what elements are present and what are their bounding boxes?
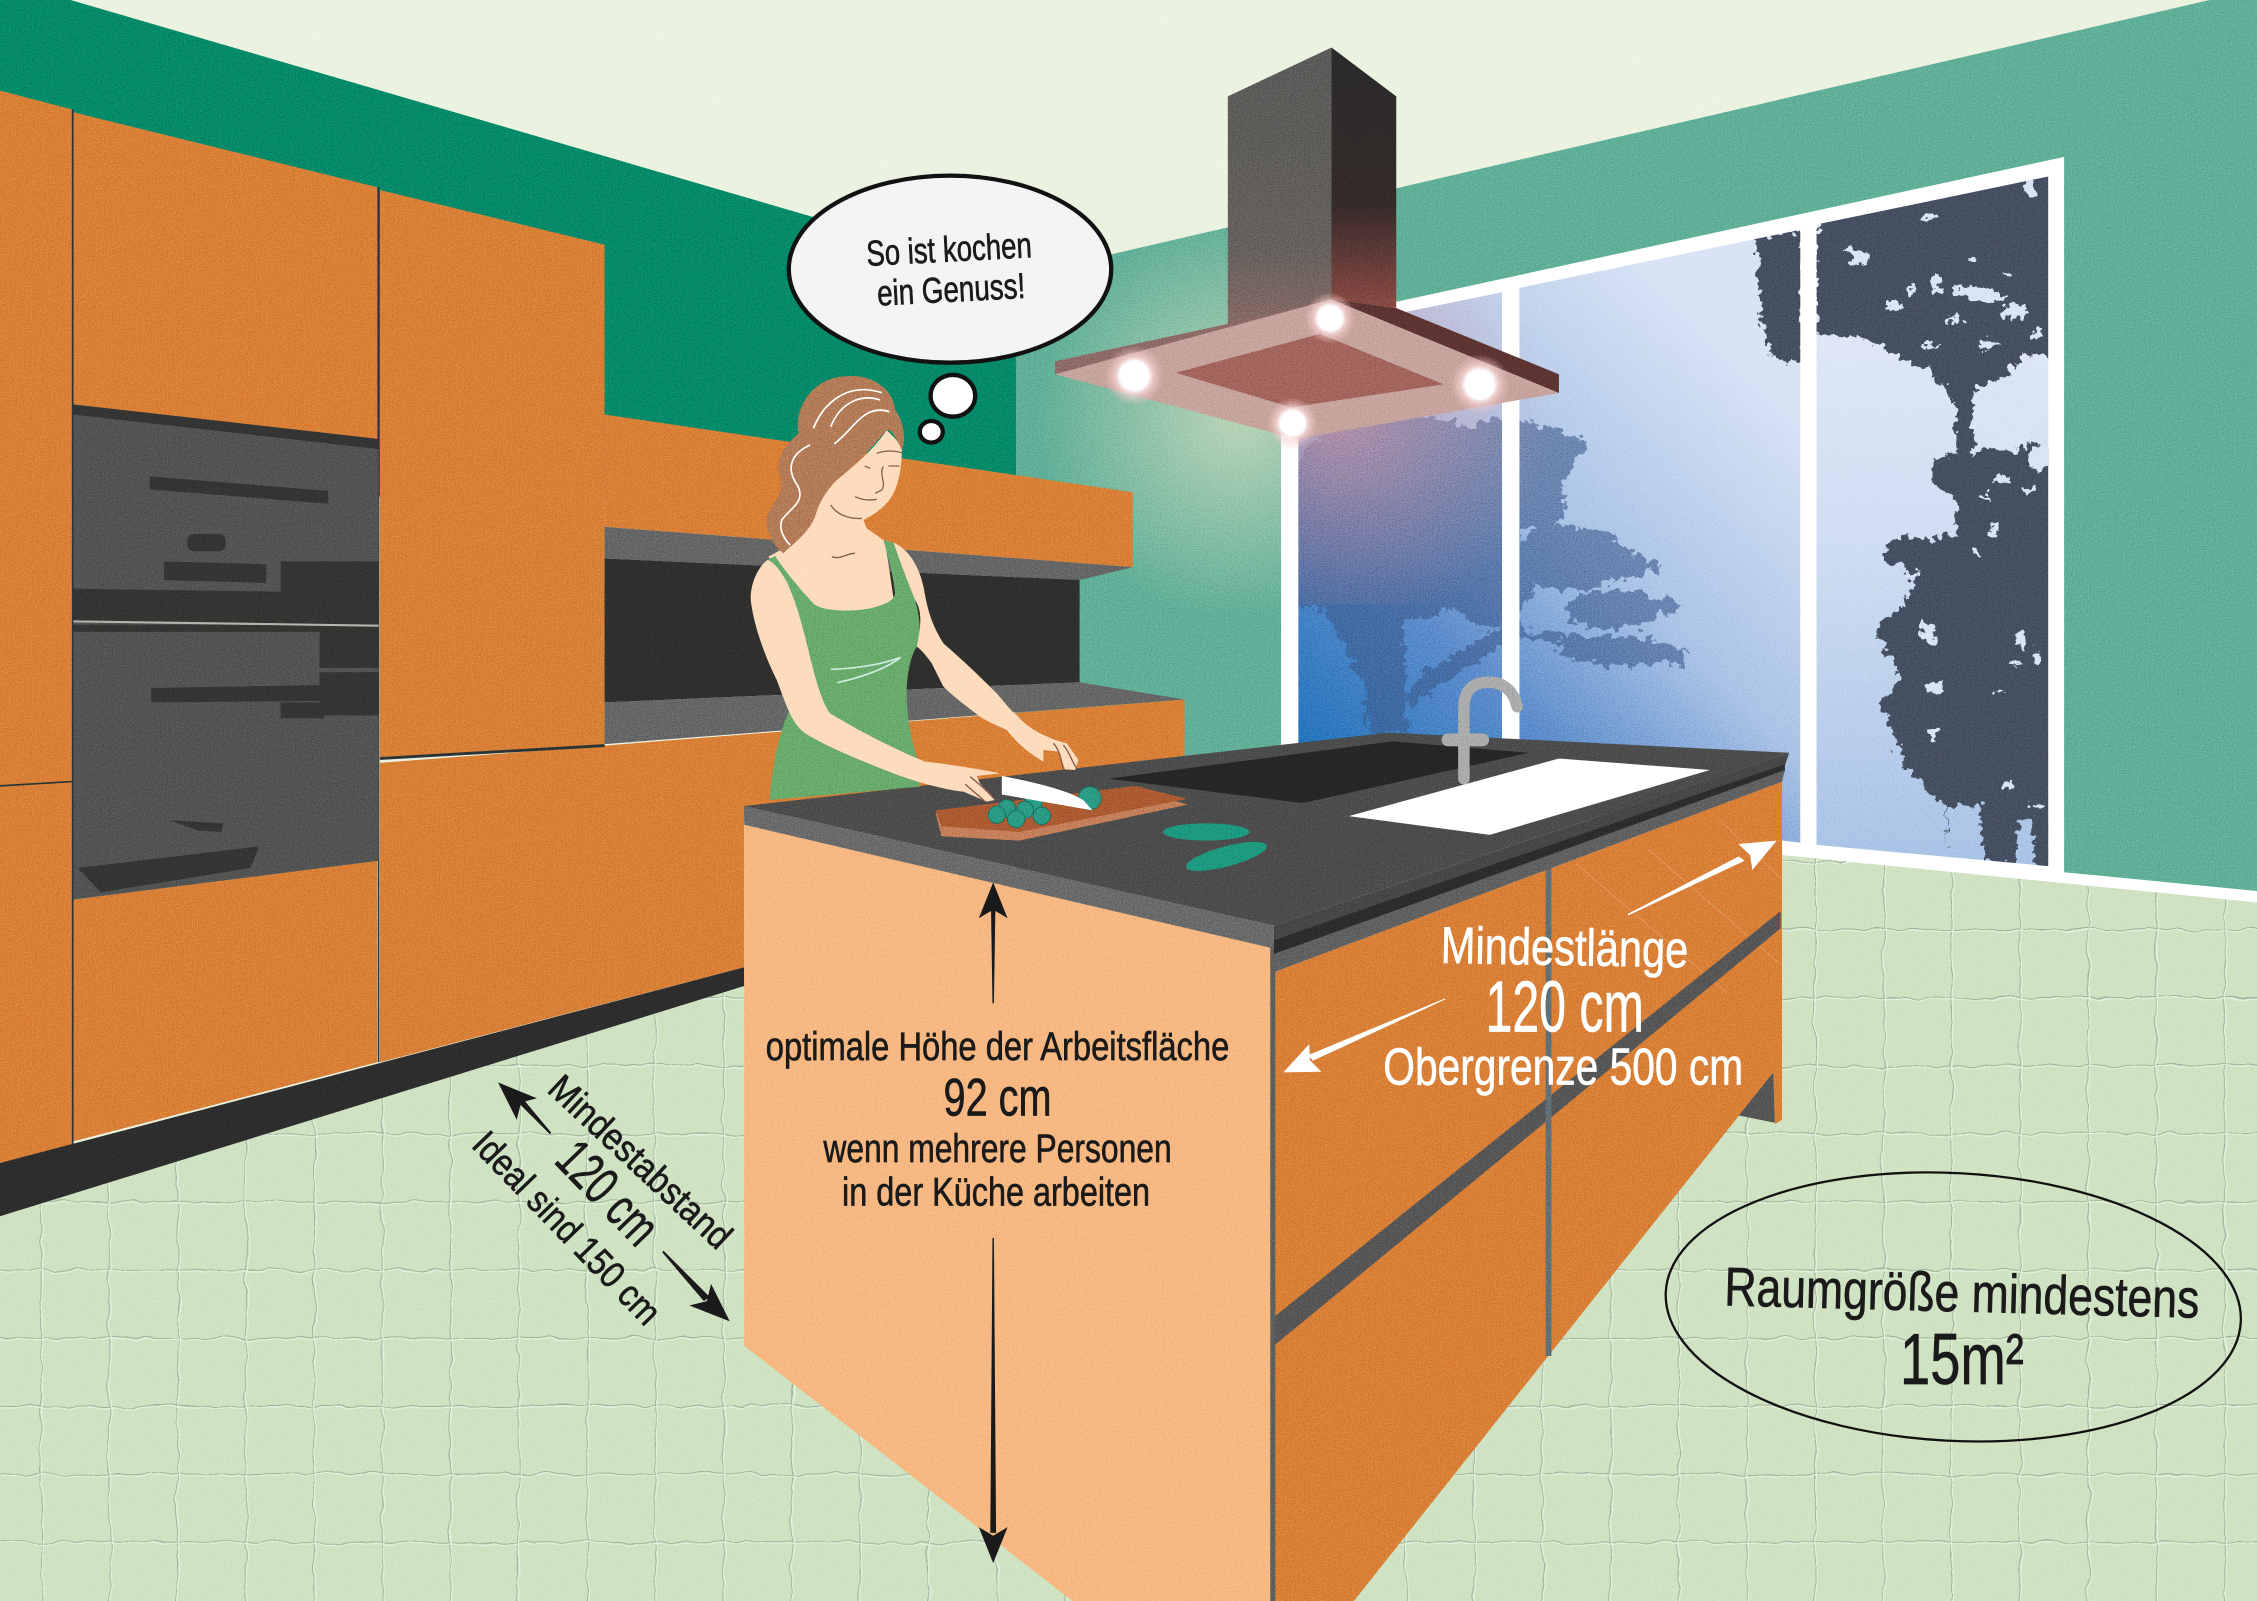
hair strands and facial lines — [781, 390, 1077, 802]
right wall — [1016, 0, 2257, 921]
distance text: 120 cm — [544, 1129, 671, 1257]
chimney — [1228, 47, 1331, 331]
woman cooking — [751, 376, 1078, 802]
white sink — [1349, 759, 1710, 835]
upper cabinet column — [73, 112, 377, 439]
height text: 92 cm — [944, 1069, 1051, 1128]
chopped cucumber — [988, 787, 1101, 828]
baseboard white strip — [1782, 842, 2257, 902]
peach end panel — [744, 825, 1271, 1601]
callout text — [1724, 1255, 2200, 1400]
height text — [766, 1024, 1229, 1214]
floor tile grid — [0, 835, 2257, 1601]
dress — [767, 540, 920, 800]
callout text: 15m² — [1900, 1320, 2024, 1400]
length text: Obergrenze 500 cm — [1383, 1038, 1743, 1096]
cabinet column far left — [0, 91, 72, 1163]
right arm — [893, 543, 1078, 770]
thought dots — [920, 375, 975, 443]
range hood — [1055, 47, 1559, 449]
floor — [0, 835, 2257, 1601]
hob — [1108, 741, 1529, 803]
black backsplash — [605, 558, 1080, 702]
cutting board — [936, 786, 1188, 841]
length text: Mindestlänge — [1440, 916, 1689, 978]
right tree — [1756, 166, 2058, 871]
face and torso skin — [768, 430, 902, 623]
back counter top — [605, 682, 1185, 744]
height annotation — [766, 882, 1229, 1563]
hood canopy — [1055, 299, 1331, 374]
cabinet joints — [0, 109, 605, 1144]
drawer gaps — [1270, 864, 1781, 1601]
lower cabinet column — [73, 861, 377, 1141]
kitchen island — [744, 682, 1789, 1601]
sky gaps in foliage — [1841, 180, 2054, 810]
base cabinets — [380, 700, 1185, 1062]
built-in oven — [73, 404, 379, 900]
upper wall cabinet band — [605, 415, 1133, 567]
distance text: Ideal sind 150 cm — [465, 1123, 670, 1333]
wall shelf underside — [605, 527, 1133, 580]
speech bubble — [789, 176, 1111, 443]
whole cucumbers — [1163, 823, 1269, 877]
faucet — [1448, 682, 1517, 779]
back wall dark green — [0, 0, 1016, 497]
white arrows — [1283, 841, 1777, 1072]
distance arrows — [498, 1082, 730, 1321]
faint panel reflections — [1576, 820, 1781, 993]
worktop — [744, 733, 1789, 926]
orange side panel — [1271, 782, 1782, 1601]
island leg shadow — [1739, 1072, 1775, 1123]
hood lamps — [1104, 292, 1510, 449]
callout ellipse — [1659, 1158, 2248, 1456]
kitchen cabinets — [0, 91, 1185, 1216]
height text: wenn mehrere Personen — [823, 1126, 1172, 1171]
height text: optimale Höhe der Arbeitsfläche — [766, 1024, 1229, 1069]
left tree — [1281, 415, 1687, 734]
room size callout — [1659, 1158, 2248, 1456]
hair — [767, 376, 904, 553]
bubble text: So ist kochen — [865, 224, 1033, 274]
length text — [1383, 916, 1743, 1096]
length text: 120 cm — [1485, 968, 1644, 1048]
window frame — [1281, 157, 2064, 921]
distance text: Mindestabstand — [540, 1066, 741, 1257]
length annotation — [1283, 841, 1777, 1096]
distance annotation — [465, 1066, 741, 1333]
window — [1281, 157, 2064, 921]
bubble text: ein Genuss! — [876, 265, 1026, 314]
tall cabinet — [380, 190, 605, 759]
hood light glow on window — [1298, 298, 1534, 604]
window panes sky — [1298, 176, 2048, 866]
knife — [1002, 776, 1093, 810]
height text: in der Küche arbeiten — [842, 1169, 1150, 1214]
plinth — [0, 967, 744, 1216]
bubble text — [865, 224, 1035, 314]
left arm — [751, 560, 1000, 802]
height arrow — [979, 882, 1008, 1563]
tree silhouettes outside — [1281, 166, 2058, 871]
distance text — [465, 1066, 741, 1333]
